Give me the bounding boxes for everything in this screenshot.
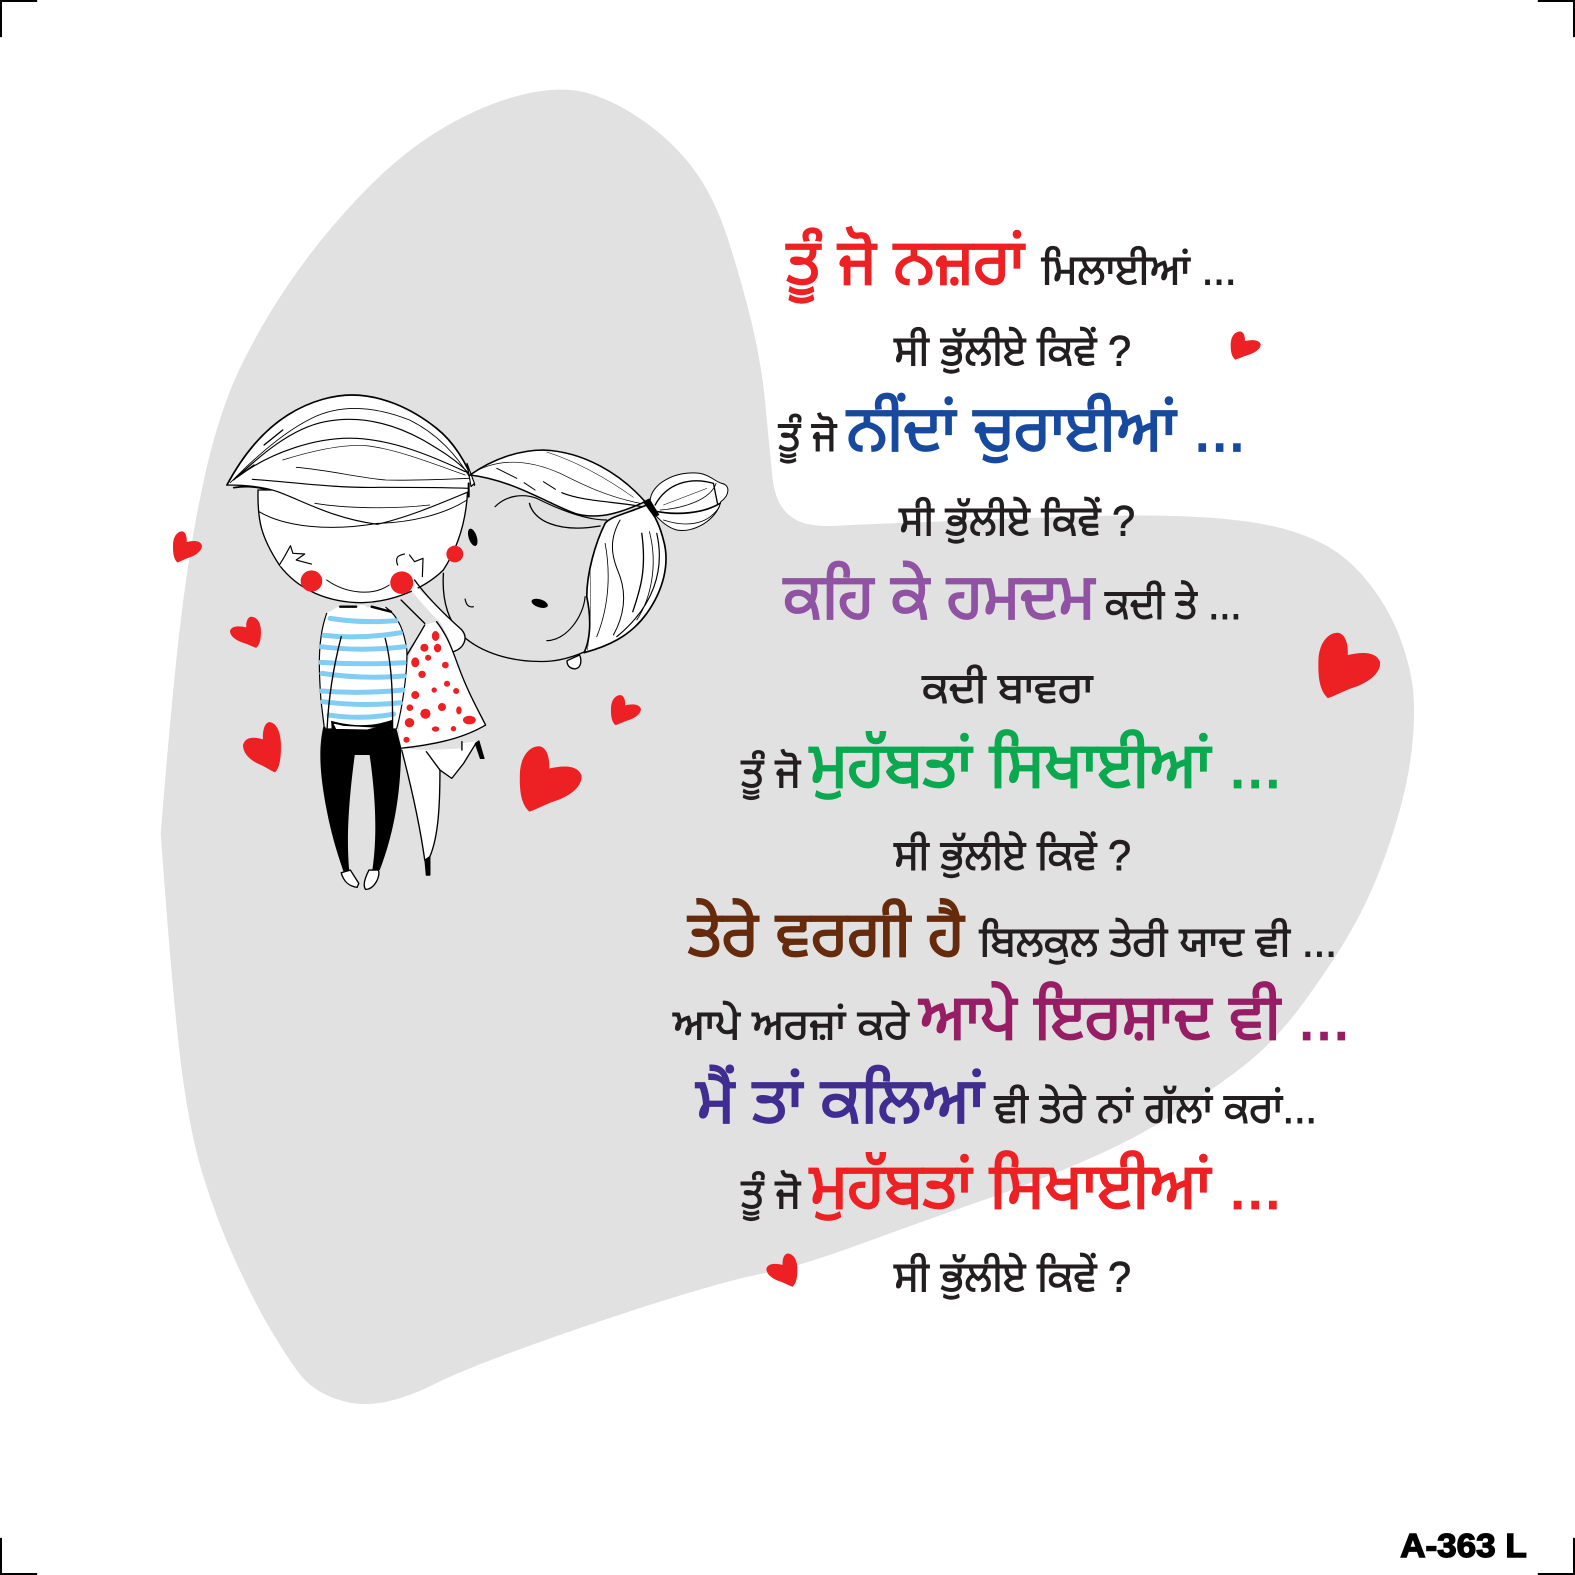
line 3: ਨੀਂਦਾਂ ਚੁਰਾਈਆਂ ... — [846, 393, 1246, 465]
girl face outline — [443, 573, 585, 661]
cheek: boy right — [390, 571, 413, 594]
illustration: couple — [227, 395, 728, 889]
heart: left lower — [243, 722, 281, 772]
heart: centre small — [611, 695, 641, 725]
boy hand left — [279, 546, 313, 576]
heart: far left — [173, 531, 202, 562]
line 10: ਆਪੇ ਇਰਸ਼ਾਦ ਵੀ ... — [918, 982, 1350, 1054]
cheek: girl — [446, 546, 463, 562]
line 9: ਤੇਰੇ ਵਰਗੀ ਹੈ — [687, 898, 965, 970]
girl closed eye — [530, 597, 549, 610]
girl ponytail — [584, 505, 666, 653]
heart: left upper — [230, 617, 261, 648]
line 5: ਕਹਿ ਕੇ ਹਮਦਮ — [783, 561, 1096, 633]
cheek: boy left — [301, 570, 322, 592]
boy shoes — [341, 870, 379, 889]
girl dress — [399, 622, 486, 748]
line 9 — [687, 898, 1337, 970]
background blob — [161, 90, 1414, 1404]
line 6: ਕਦੀ ਬਾਵਰਾ — [921, 665, 1094, 712]
poem text — [672, 226, 1350, 1301]
heart: top right small — [1231, 331, 1261, 360]
girl hand — [397, 554, 423, 577]
hand outline — [279, 546, 311, 565]
boy hair — [227, 395, 475, 527]
line 10 — [672, 982, 1350, 1054]
girl eye — [466, 528, 479, 547]
girl bun — [643, 473, 728, 531]
line 9: ਬਿਲਕੁਲ ਤੇਰੀ ਯਾਦ ਵੀ ... — [978, 918, 1337, 965]
line 4: ਸੀ ਭੁੱਲੀਏ ਕਿਵੇਂ ? — [898, 496, 1135, 544]
line 11 — [695, 1065, 1317, 1137]
line 7: ਮੁਹੱਬਤਾਂ ਸਿਖਾਈਆਂ ... — [809, 730, 1282, 802]
girl arm — [410, 583, 465, 652]
heart: centre large — [520, 746, 582, 812]
line 10: ਆਪੇ ਅਰਜ਼ਾਂ ਕਰੇ — [672, 1002, 910, 1049]
boy shirt — [319, 607, 407, 731]
line 3: ਤੂੰ ਜੋ — [777, 413, 838, 463]
heart: right large — [1318, 633, 1380, 698]
boy trousers — [320, 727, 401, 872]
line 8: ਸੀ ਭੁੱਲੀਏ ਕਿਵੇਂ ? — [893, 831, 1131, 879]
line 1: ਮਿਲਾਈਆਂ ... — [1041, 246, 1236, 293]
line 7: ਤੂੰ ਜੋ — [740, 749, 802, 799]
girl leg — [401, 741, 484, 875]
girl earring — [567, 655, 581, 669]
line 11: ਵੀ ਤੇਰੇ ਨਾਂ ਗੱਲਾਂ ਕਰਾਂ... — [993, 1085, 1317, 1132]
line 12: ਮੁਹੱਬਤਾਂ ਸਿਖਾਈਆਂ ... — [809, 1150, 1282, 1222]
line 1 — [786, 226, 1236, 302]
line 1: ਤੂੰ ਜੋ ਨਜ਼ਰਾਂ — [786, 226, 1025, 302]
line 2: ਸੀ ਭੁੱਲੀਏ ਕਿਵੇਂ ? — [893, 327, 1131, 375]
heart: bottom — [766, 1254, 797, 1287]
line 5: ਕਦੀ ਤੇ ... — [1104, 581, 1242, 628]
line 11: ਮੈਂ ਤਾਂ ਕਲਿਆਂ — [695, 1065, 986, 1137]
girl arm back line — [401, 600, 425, 623]
product code: A-363 L — [1400, 1528, 1527, 1565]
line 12: ਤੂੰ ਜੋ — [740, 1170, 802, 1220]
boy neck — [357, 605, 367, 614]
boy head — [258, 490, 468, 603]
boy smile — [327, 580, 389, 592]
girl arm outline — [415, 580, 465, 652]
girl leg outline — [402, 741, 484, 875]
line 13: ਸੀ ਭੁੱਲੀਏ ਕਿਵੇਂ ? — [893, 1253, 1131, 1301]
girl hair top — [470, 450, 645, 528]
